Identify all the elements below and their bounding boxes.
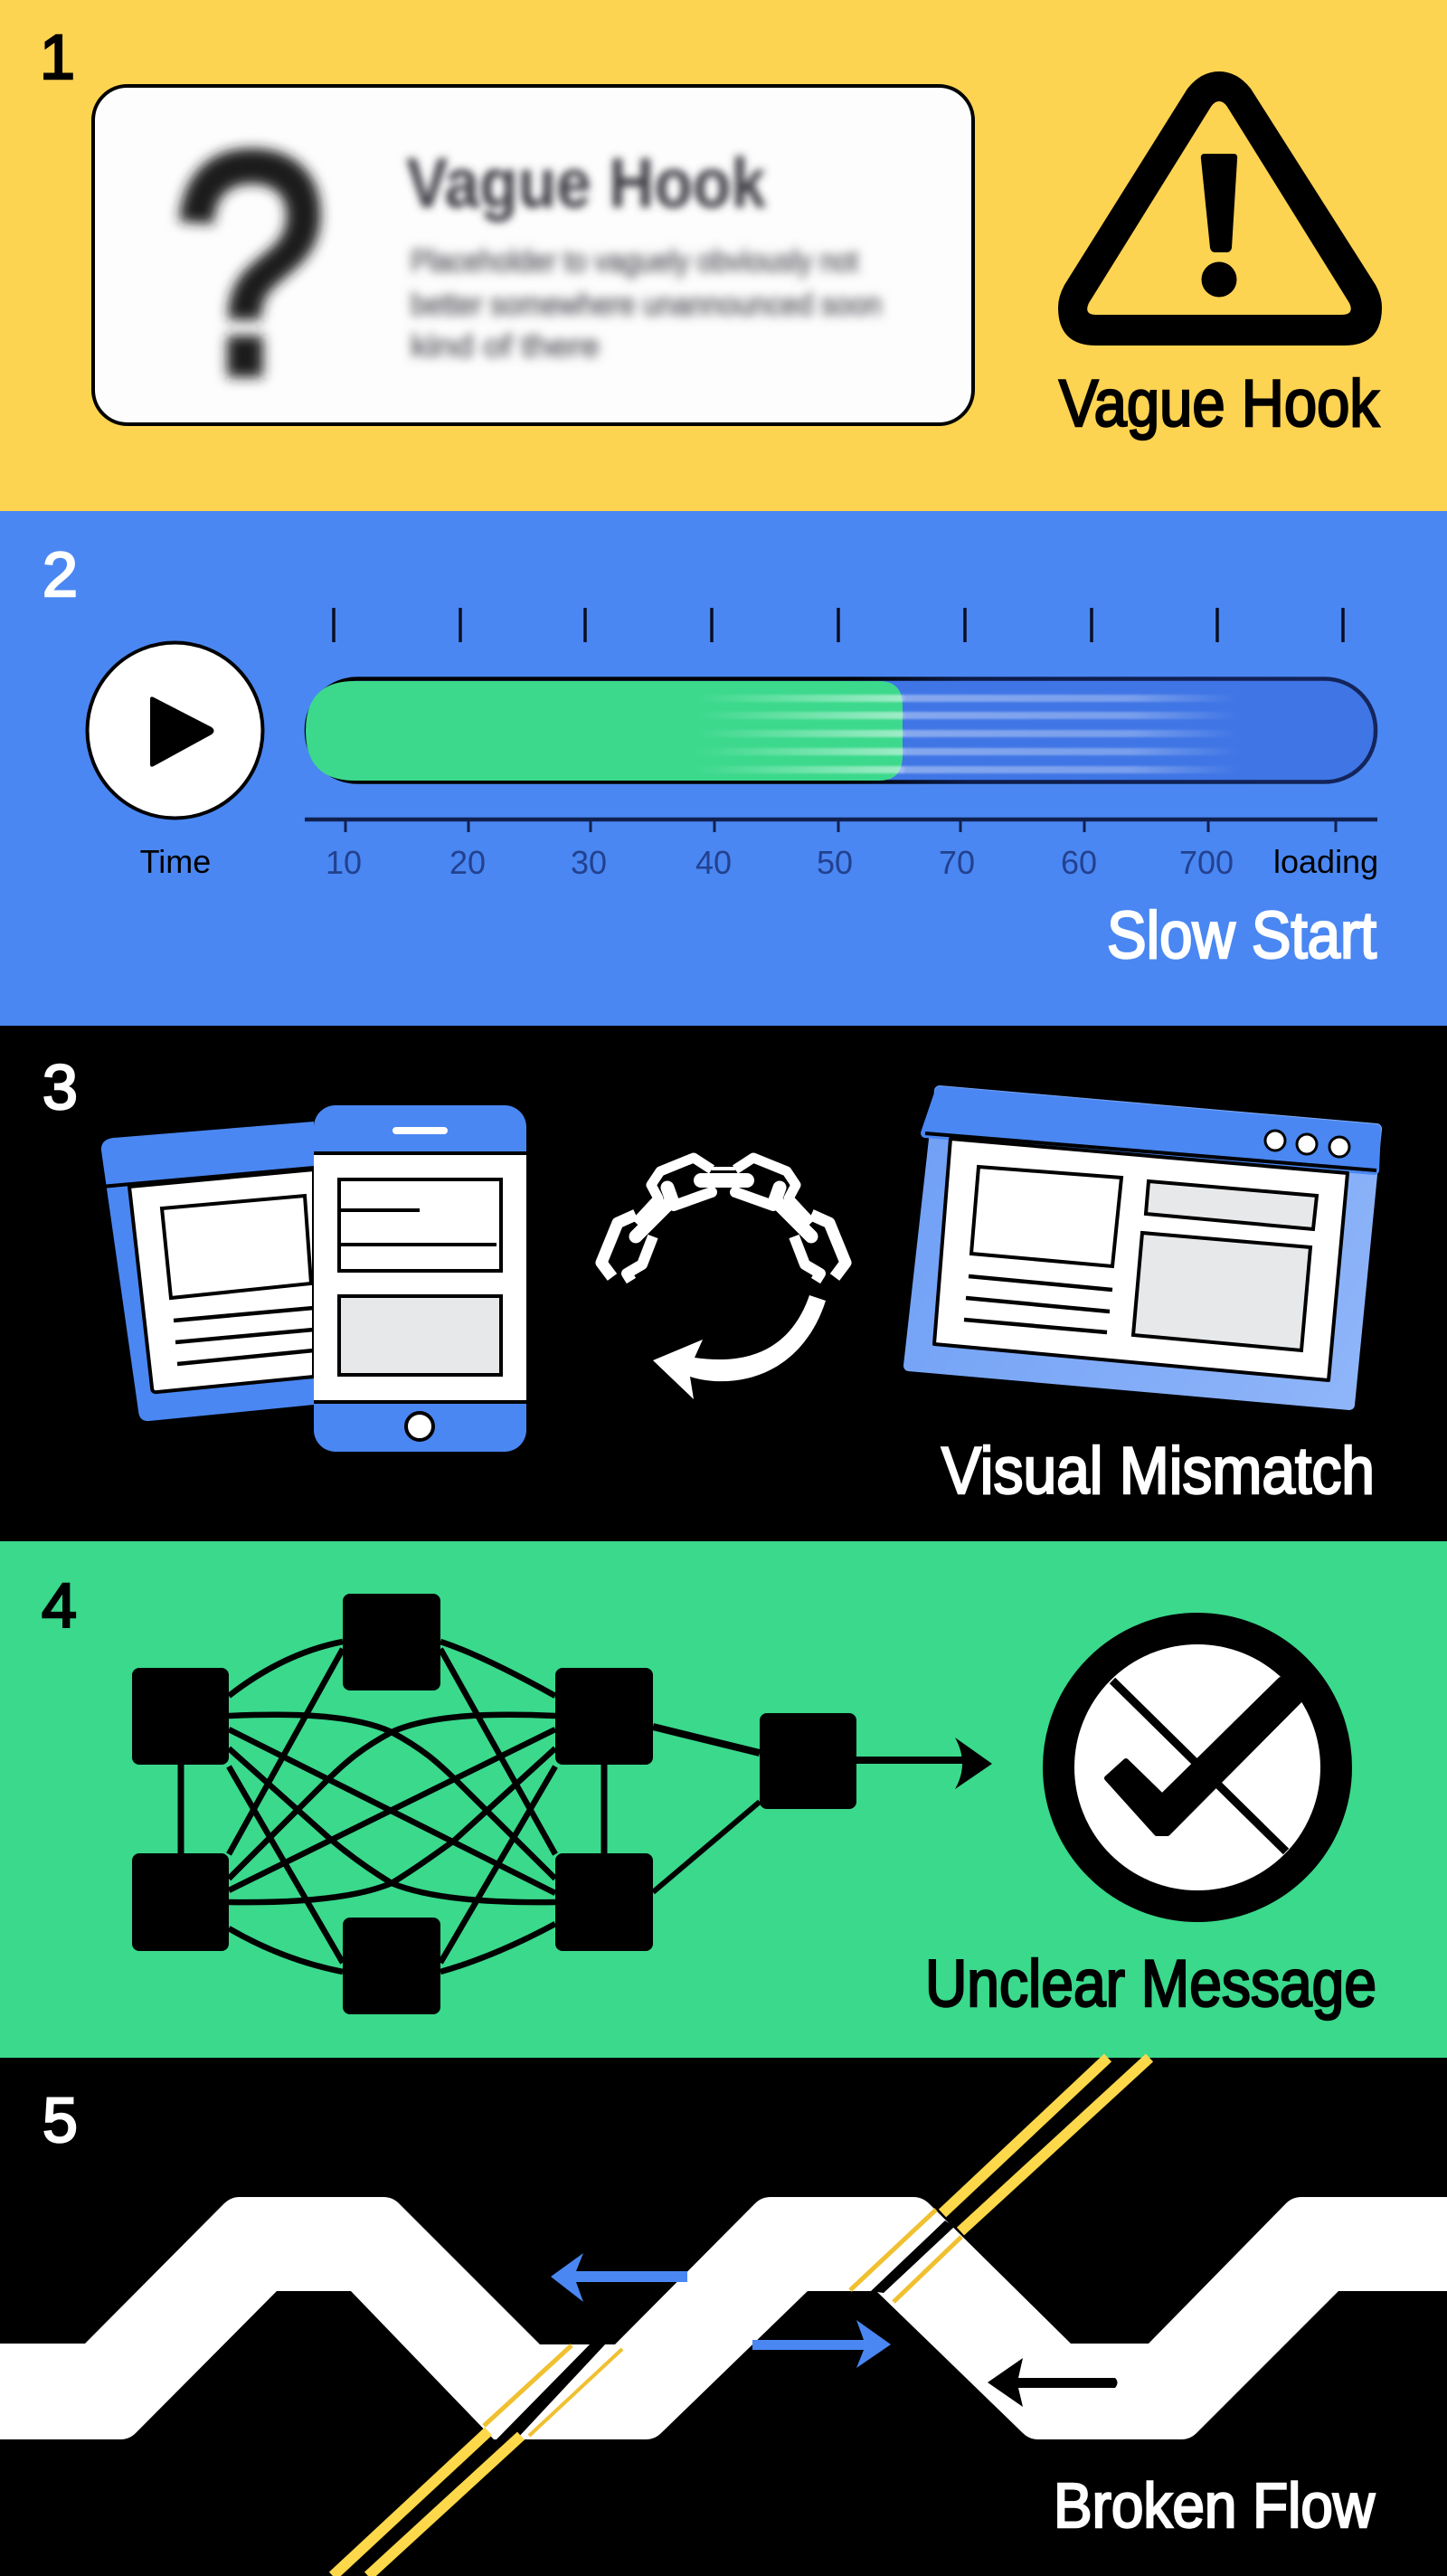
number 3: 3 — [43, 1052, 78, 1122]
upper road break with yellow lines — [850, 2058, 1149, 2302]
white zigzag road — [0, 2197, 1447, 2439]
panel 1: vague hook — [0, 0, 1447, 511]
green fill — [306, 681, 903, 781]
blurred body copy: better somewhere unannounced soon — [411, 288, 882, 322]
icon: play button — [87, 642, 262, 818]
progress bar — [306, 678, 1376, 781]
blurred hook card — [93, 86, 973, 438]
arrow: blue right — [752, 2320, 891, 2368]
number 4: 4 — [42, 1570, 77, 1641]
panel 3: visual mismatch — [0, 1026, 1447, 1541]
axis numbers: 60 — [1061, 844, 1097, 881]
tangled network diagram — [132, 1594, 856, 2014]
icon: phone mockup — [314, 1105, 526, 1452]
number 1: 1 — [40, 22, 75, 92]
time axis — [305, 819, 1378, 881]
label: Vague Hook: Vague Hook — [1059, 367, 1379, 440]
number 5: 5 — [43, 2085, 78, 2155]
window control dots — [1265, 1131, 1349, 1157]
blurred body copy — [411, 244, 882, 364]
arrow: black left — [988, 2358, 1118, 2407]
axis numbers: 10 — [326, 844, 362, 881]
panel 2: slow start — [0, 511, 1447, 1026]
panel 5: broken flow — [0, 2058, 1447, 2576]
label: Visual Mismatch: Visual Mismatch — [941, 1435, 1375, 1508]
axis numbers: 20 — [449, 844, 486, 881]
number 2: 2 — [43, 539, 78, 610]
icon: warning triangle — [1058, 71, 1382, 346]
icon: curved arrow — [653, 1295, 826, 1399]
label: Unclear Message: Unclear Message — [925, 1947, 1376, 2021]
blurred heading: Vague Hook — [406, 143, 767, 223]
label: Broken Flow: Broken Flow — [1054, 2470, 1375, 2541]
icon: blurred question mark: ? — [174, 90, 326, 438]
panel 4: unclear message — [0, 1541, 1447, 2058]
network connections — [181, 1642, 760, 1972]
icon: desktop window mockup — [909, 1091, 1376, 1405]
axis numbers — [326, 844, 1234, 881]
speed streaks — [696, 695, 1239, 773]
network nodes — [132, 1594, 856, 2014]
axis numbers: 40 — [695, 844, 732, 881]
icon: tablet mockup — [101, 1122, 314, 1421]
icon: broken chain — [601, 1158, 846, 1281]
blurred body copy: kind of there — [411, 329, 600, 364]
label: Slow Start: Slow Start — [1107, 899, 1376, 972]
icon: struck-through check circle — [1058, 1628, 1337, 1907]
lower road break with yellow lines — [333, 2344, 622, 2576]
label: Time: Time — [140, 843, 211, 880]
label: loading: loading — [1273, 843, 1378, 880]
axis numbers: 50 — [817, 844, 853, 881]
axis numbers: 700 — [1179, 844, 1234, 881]
axis numbers: 70 — [939, 844, 975, 881]
blurred body copy: Placeholder to vaguely obviously not — [411, 244, 858, 279]
arrow to result — [856, 1738, 992, 1789]
arrow: blue left — [551, 2253, 687, 2302]
top ticks — [334, 608, 1343, 642]
axis numbers: 30 — [571, 844, 607, 881]
